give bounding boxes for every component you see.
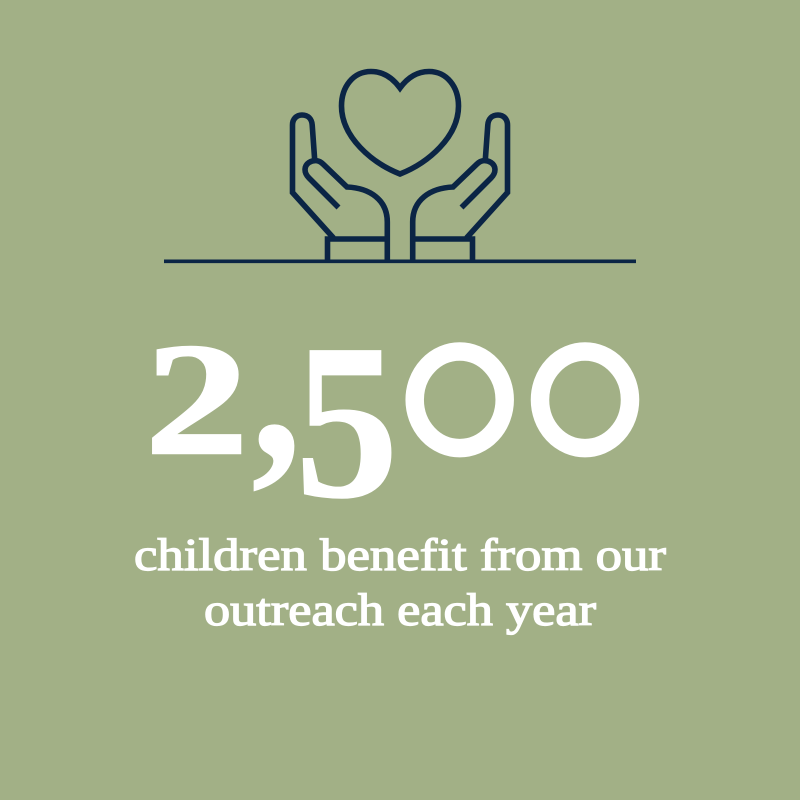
big number: 2,500: 2 — [145, 311, 249, 488]
ground line — [164, 259, 636, 263]
icon: heart — [342, 72, 458, 174]
icon: left hand — [292, 115, 387, 261]
icon: hands holding heart — [164, 72, 636, 261]
big number: 2,500: 0 — [538, 327, 641, 476]
big number: 2,500 — [145, 264, 641, 545]
big number: 2,500: 5 — [295, 299, 398, 545]
caption text — [134, 529, 666, 635]
big number: 2,500: , — [252, 264, 301, 505]
icon: right hand — [413, 115, 508, 261]
caption text: outreach each year — [204, 584, 596, 635]
caption text: children benefit from our — [134, 529, 666, 580]
big number: 2,500: 0 — [413, 327, 516, 476]
